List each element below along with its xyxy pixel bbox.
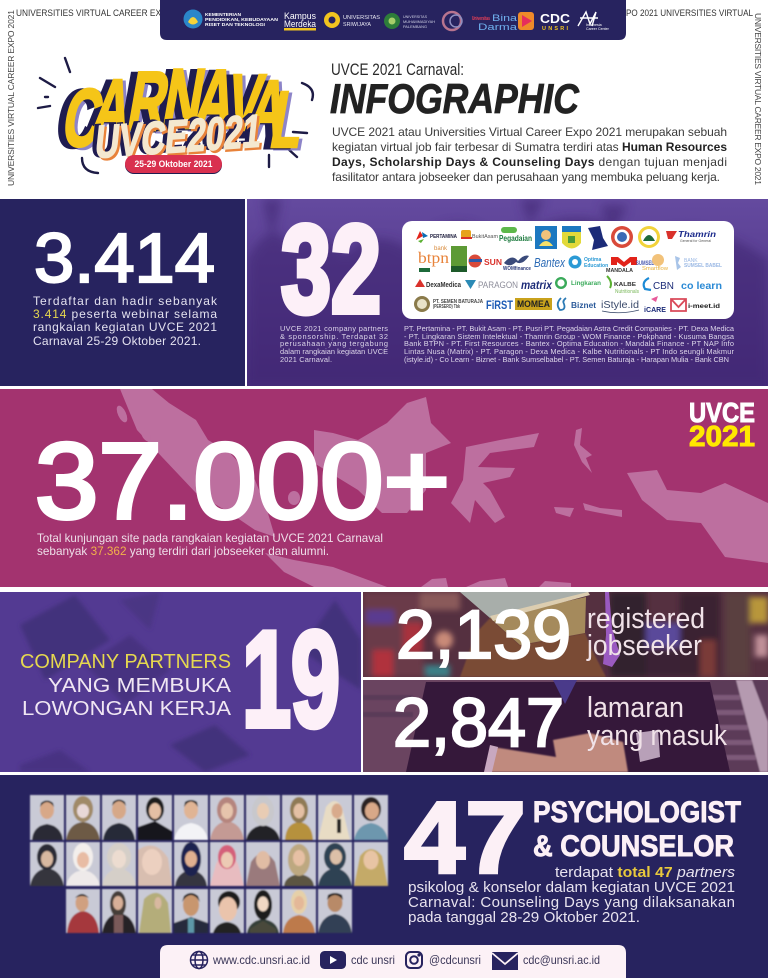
Carnaval lavender edge: A: [192, 54, 246, 148]
Carnaval lavender edge: A: [246, 67, 297, 156]
logos row 1: PERTAMINA: [430, 234, 457, 240]
icon: instagram: [406, 952, 422, 968]
partner list: PT. Pertamina - PT. Bukit Asam - PT. Pusri PT. Pegadaian Astra Credit Companies - PT. Dexa Medica: [404, 324, 735, 333]
logos row 4: iCARE: [644, 307, 666, 314]
Carnaval main letters: V: [221, 59, 270, 148]
logo: Bina Darma: Bina: [492, 13, 517, 23]
header logo bar: [160, 0, 626, 40]
panel: site visits: [0, 389, 768, 587]
date pill: 25-29 Oktober 2021: [134, 159, 212, 169]
visits caption: sebanyak 37.362 yang terdiri dari jobseeker dan alumni.: [37, 544, 329, 558]
logos row 4: iStyle.id: [601, 300, 639, 311]
logos row 1: BukitAsam: [472, 234, 498, 240]
Carnaval navy shadow: R: [115, 55, 169, 149]
partner list: Lintas Nusa (Matrix) - PT. Paragon - Dexa Medica - Kalbe Nutritionals - PT Indo seungli Makmur: [404, 347, 735, 356]
heading: Psychologist and Counselor: PSYCHOLOGIST: [533, 796, 741, 829]
logo: Universitas Muhammadiyah Palembang: [384, 13, 435, 29]
title: Infographic: INFOGRAPHIC: [330, 75, 580, 122]
logos row 3: co learn: [681, 280, 722, 292]
UVCE 2021 mark: 2021: [689, 421, 755, 453]
Carnaval lavender edge: N: [160, 54, 214, 149]
stat: 37.000+: 37.000+: [35, 420, 450, 541]
Carnaval lavender edge: V: [224, 61, 273, 150]
partners description: UVCE 2021 company partners: [280, 324, 388, 333]
partners description: [280, 324, 388, 364]
marquee: top left: UNIVERSITIES VIRTUAL CAREER EX: [16, 8, 162, 19]
logo: Bina Darma: [472, 12, 534, 32]
visits caption: [37, 531, 383, 558]
vacancies label: COMPANY PARTNERS: [20, 650, 231, 673]
logo: Universitas Sriwijaya: [324, 12, 380, 28]
Carnaval main letters: [57, 52, 311, 165]
counselor description: psikolog & konselor dalam kegiatan UVCE 2021: [408, 879, 735, 896]
vacancies label: YANG MEMBUKA: [48, 674, 231, 697]
partners description: & sponsorship. Terdapat 32: [280, 332, 388, 341]
logos row 3: DexaMedica: [426, 280, 462, 289]
logo: Kemendikbud: KEMENTERIAN: [205, 12, 242, 17]
logos row 2: Smartflow: [642, 266, 668, 272]
logos row 3: Lingkaran: [571, 281, 601, 287]
logos row 2: [418, 246, 723, 274]
logos row 2: BANK: [684, 258, 698, 264]
email: cdc@unsri.ac.id: [523, 953, 600, 967]
logos row 2: SUMSEL BABEL: [684, 263, 723, 269]
webinar text: Terdaftar dan hadir sebanyak: [33, 294, 218, 308]
panel: company partners with vacancies: [0, 592, 361, 772]
logos row 1: Thamrin: [678, 230, 716, 239]
Carnaval navy shadow: A: [182, 53, 236, 147]
Carnaval lavender edge: A: [90, 66, 141, 155]
logos row 2: btpn: [418, 250, 449, 267]
map of Indonesia: [115, 389, 768, 587]
label: lamaran yang masuk: yang masuk: [587, 720, 727, 752]
Carnaval lavender edge: L: [268, 78, 314, 167]
label: registered jobseeker: jobseeker: [586, 630, 702, 662]
Carnaval main letters: A: [243, 65, 294, 154]
logos row 1: Pegadaian: [499, 234, 532, 243]
logos row 4: (PERSERO) Tbk: [433, 304, 460, 310]
Carnaval main letters: C: [57, 72, 110, 164]
logos row 1: General for General: [680, 239, 711, 243]
Carnaval main letters: A: [189, 52, 243, 146]
logo: CDC UNSRI: [540, 11, 571, 32]
graduation photo background: [363, 592, 768, 677]
panel: psychologist and counselor: [0, 775, 768, 978]
logo: Kampus Merdeka: [284, 11, 316, 30]
logos row 4: FiRST: [486, 298, 514, 312]
suit photo background: [363, 680, 768, 772]
icon: mail: [492, 952, 518, 970]
date pill: [125, 155, 222, 174]
logo: Universitas Muhammadiyah Palembang: UNIVERSITAS: [403, 15, 428, 19]
label: registered jobseeker: registered: [587, 603, 705, 635]
heading: Psychologist and Counselor: & COUNSELOR: [533, 830, 734, 863]
logos row 3: KALBE: [614, 282, 636, 288]
logo: Bina Darma: Universitas: [472, 16, 490, 22]
counselor description: pada tanggal 28-29 Oktober 2021.: [408, 909, 640, 926]
logos row 2: SUMSEL: [636, 261, 654, 267]
stat: 3.414: 3.414: [34, 219, 215, 297]
logos row 2: bank: [434, 246, 448, 252]
hair, mortarboard and tassel: [460, 618, 606, 677]
panel: company partners: [247, 199, 768, 386]
intro paragraph: [332, 125, 727, 184]
vacancies label: [20, 650, 231, 720]
logos row 3: [415, 276, 722, 295]
partner logos card: [402, 221, 734, 319]
UVCE2021 main: UVCE2021: [93, 104, 264, 168]
footer contact bar: [160, 945, 626, 978]
logos row 4: i-meet.id: [688, 303, 720, 310]
icon: globe: [190, 952, 208, 968]
Carnaval main letters: L: [265, 76, 311, 165]
Carnaval navy shadow: V: [214, 60, 263, 149]
visits caption: Total kunjungan site pada rangkaian kegiatan UVCE 2021 Carnaval: [37, 531, 383, 545]
logo: Bina Darma: Darma: [478, 22, 517, 32]
partner list: Bank BTPN - PT. First Resources - Bantex - Optima Education - Mandala Finance - PT NAP Info: [404, 339, 734, 348]
webinar text: 3.414 peserta webinar selama: [33, 307, 217, 321]
stat: 2,847: 2,847: [393, 684, 564, 761]
logos row 2: Bantex: [534, 255, 565, 270]
logo: CDC UNSRI: CDC: [540, 11, 571, 26]
partner list: - PT. Lingkaran Sistem Intelektual - Thamrin Group - WOM Finance - Pokphand - Kusuma Bangsa: [404, 332, 735, 341]
counselor photo grid: [30, 795, 388, 933]
logo: Kampus Merdeka: Kampus: [284, 11, 316, 21]
instagram handle: @cdcunsri: [429, 955, 481, 967]
Carnaval main letters: R: [122, 54, 176, 148]
logos row 2: WOMfinance: [503, 266, 531, 272]
stat: 19: 19: [242, 603, 340, 755]
video channel name: cdc unsri: [351, 953, 395, 967]
logos row 3: PARAGON: [478, 280, 518, 290]
logo: CDC UNSRI: UNSRI: [542, 26, 569, 32]
counselor description: Carnaval: Counseling Days yang dilaksanakan: [408, 894, 735, 911]
counselor description: [408, 864, 736, 926]
logos row 4: Biznet: [571, 300, 596, 310]
heading: Psychologist and Counselor: [533, 796, 741, 863]
Carnaval lavender edge: [60, 54, 314, 167]
intro paragraph: Days, Scholarship Days & Counseling Days dengan tujuan menjadi: [332, 155, 727, 169]
logos row 2: Optima: [584, 257, 601, 263]
logo: Universitas Muhammadiyah Palembang: PALEMBANG: [403, 25, 427, 29]
stat: 32: 32: [281, 201, 381, 339]
logos row 3: matrix: [521, 278, 553, 292]
logos row 2: SUN: [484, 257, 502, 267]
logos row 1: [416, 226, 716, 250]
logo: Carnaval UVCE 2021: [38, 52, 314, 174]
logo: Indonesia Career Center Network: Indonesia: [586, 23, 602, 27]
marquee: right vertical: UNIVERSITIES VIRTUAL CAREER EXPO 2021: [753, 13, 763, 185]
icon: video channel: [320, 951, 346, 969]
marquee: left vertical: UNIVERSITIES VIRTUAL CAREER EXPO 2021: [6, 10, 16, 186]
UVCE 2021 mark: UVCE: [689, 397, 755, 428]
logos row 2: Education: [584, 263, 608, 269]
logo: Kemendikbud: RISET DAN TEKNOLOGI: [205, 22, 265, 27]
photo row 2: [30, 842, 388, 886]
logo: Universitas Sriwijaya: SRIWIJAYA: [343, 22, 371, 28]
label: lamaran yang masuk: lamaran: [587, 692, 684, 724]
panel: webinar participants: [0, 199, 245, 386]
crowd silhouette background: [247, 199, 768, 386]
webinar text: rangkaian kegiatan UVCE 2021: [33, 320, 217, 334]
decorative rays: [38, 58, 313, 173]
Carnaval navy shadow: C: [50, 73, 103, 165]
partners description: perusahaan yang tergabung: [280, 339, 388, 348]
partner list: [404, 324, 735, 364]
website: www.cdc.unsri.ac.id: [212, 953, 310, 967]
UVCE2021 navy shadow: UVCE2021: [89, 103, 260, 167]
intro paragraph: fasilitator antara jobseeker dan perusahaan yang membuka peluang kerja.: [332, 170, 720, 184]
partner list: (istyle.id) - Co Learn - Biznet - Bank Sumselbabel - PT. Semen Baturaja - Harapan Mulia - Bank CBN: [404, 355, 729, 364]
Carnaval navy shadow: A: [80, 65, 131, 154]
logo: Indonesia Career Center Network: Career Center: [586, 27, 610, 31]
Carnaval main letters: N: [157, 52, 211, 147]
logos row 3: Nutritionals: [615, 289, 639, 295]
logo: Universitas Muhammadiyah Palembang: MUHAMMADIYAH: [403, 20, 435, 24]
logos row 2: MANDALA: [606, 268, 633, 274]
subtitle: UVCE 2021 Carnaval:: [331, 60, 464, 79]
webinar text: [33, 294, 218, 348]
logos row 4: [414, 296, 720, 314]
logo: Kemendikbud: PENDIDIKAN, KEBUDAYAAN: [205, 17, 279, 22]
Carnaval lavender edge: R: [125, 56, 179, 150]
photo row 3: [66, 889, 352, 933]
logos row 4: MOMEA: [517, 299, 550, 309]
logo: Kemendikbud: [184, 10, 279, 28]
Carnaval navy shadow: N: [150, 53, 204, 148]
Carnaval navy shadow: [50, 53, 304, 166]
label: lamaran yang masuk: [587, 692, 727, 752]
partners description: 2021 Carnaval.: [280, 355, 332, 364]
logo: university emblem: [443, 12, 462, 30]
webinar text: Carnaval 25-29 Oktober 2021.: [33, 334, 201, 348]
stat: 2,139: 2,139: [396, 596, 571, 673]
logo: Indonesia Career Center Network: [578, 12, 610, 31]
Carnaval navy shadow: L: [258, 77, 304, 166]
logos row 3: CBN: [653, 281, 674, 292]
logo: Universitas Sriwijaya: UNIVERSITAS: [343, 15, 380, 21]
Carnaval main letters: A: [87, 64, 138, 153]
Carnaval lavender edge: C: [60, 74, 113, 166]
intro paragraph: UVCE 2021 atau Universities Virtual Career Expo 2021 merupakan sebuah: [332, 125, 727, 139]
UVCE2021 orange edge: UVCE2021: [95, 106, 266, 170]
stat: 47: 47: [404, 781, 526, 895]
logos row 4: PT. SEMEN BATURAJA: [433, 299, 483, 305]
graduation caps background: [20, 592, 361, 772]
label: registered jobseeker: [586, 603, 705, 662]
UVCE 2021 mark: [689, 397, 755, 453]
intro paragraph: kegiatan virtual job fair terbesar di Sumatra terdiri atas Human Resources: [332, 140, 727, 154]
logo: Kampus Merdeka: Merdeka: [284, 19, 316, 29]
photo row 1: [30, 795, 388, 840]
panel: registered jobseeker: [363, 592, 768, 677]
Carnaval navy shadow: A: [236, 66, 287, 155]
partners description: dalam rangkaian kegiatan UVCE: [280, 347, 388, 356]
vacancies label: LOWONGAN KERJA: [22, 697, 231, 720]
panel: job applications: [363, 680, 768, 772]
counselor description: terdapat total 47 partners: [555, 864, 736, 881]
